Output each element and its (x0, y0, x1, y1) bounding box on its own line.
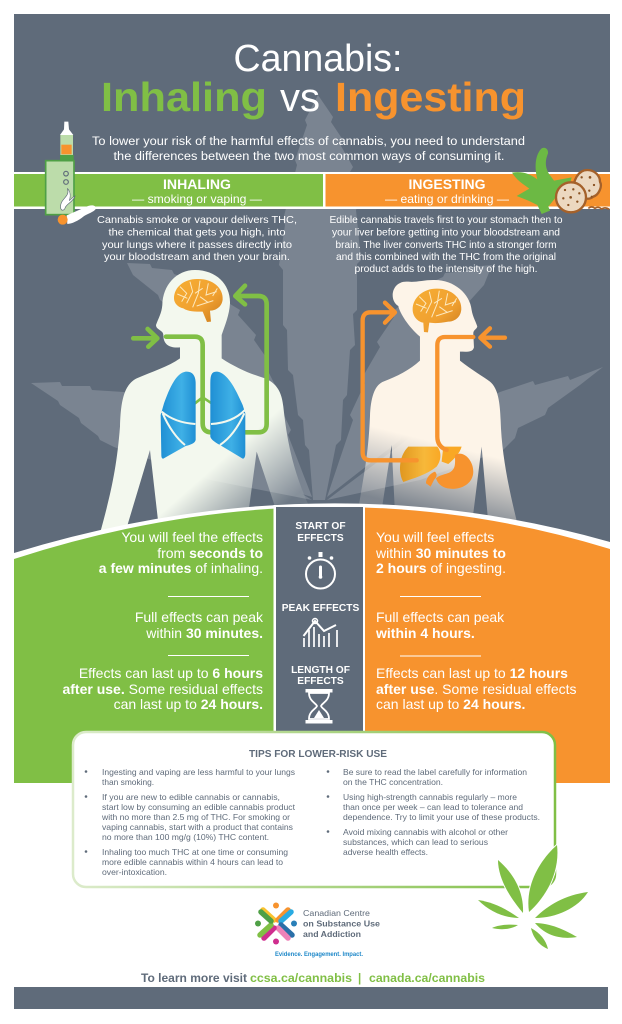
panel: ingesting effects: can last up to 24 hours. (376, 696, 525, 712)
footer link text: canada.ca/cannabis (369, 973, 485, 985)
panel: centre timeline column (274, 505, 365, 783)
tips: right column: Avoid mixing cannabis with alcohol or other (343, 827, 508, 837)
panel: centre timeline column: EFFECTS (297, 533, 344, 544)
header band: ingesting: INGESTING (408, 177, 486, 192)
panel: ingesting effects (365, 500, 610, 783)
panel: centre timeline column: PEAK EFFECTS (282, 603, 359, 614)
panel: inhaling effects: Full effects can peak (135, 609, 264, 625)
tips: left column: vaping cannabis, start with a product that contains (102, 822, 293, 832)
panel: ingesting effects: Full effects can peak (376, 609, 505, 625)
panel: ingesting effects: within 30 minutes to (375, 545, 506, 561)
tips: right column: adverse health effects. (343, 847, 428, 857)
text: inhaling description: Cannabis smoke or vapour delivers THC, (97, 214, 297, 226)
panel: ingesting effects: 2 hours of ingesting. (376, 560, 506, 576)
tips: left column: more edible cannabis within 4 hours can lead to (102, 857, 283, 867)
text: ingesting description: product adds to the intensity of the high. (354, 263, 538, 275)
footer link text (141, 973, 485, 985)
icon: leaf and cookies (512, 148, 609, 214)
text: inhaling description: your lungs where it passes directly into (102, 239, 292, 251)
title: Ingesting (335, 74, 526, 120)
title: vs (280, 76, 320, 120)
panel: centre timeline column: EFFECTS (297, 676, 344, 687)
text: ingesting description: your liver before getting into your bloodstream and (332, 226, 560, 238)
tips: left column: start low by consuming an edible cannabis product (102, 802, 296, 812)
panel: inhaling effects: You will feel the effects (121, 529, 263, 545)
tips: right column: Be sure to read the label carefully for information (343, 767, 527, 777)
header band: inhaling: — smoking or vaping — (132, 192, 262, 206)
icon: green cannabis leaf (478, 845, 588, 949)
brain (174, 279, 223, 322)
brain (413, 289, 461, 332)
tips: left column (85, 767, 296, 877)
panel: centre timeline column: LENGTH OF (291, 665, 350, 676)
liver and stomach (400, 447, 473, 489)
intro text (92, 134, 525, 163)
tips: left column: Ingesting and vaping are less harmful to your lungs (102, 767, 295, 777)
panel: ingesting effects: Effects can last up to 12 hours (376, 665, 568, 681)
title: Inhaling (101, 74, 267, 120)
tips: right column: substances, which can lead to serious (343, 837, 488, 847)
header band: inhaling: INHALING (163, 177, 231, 192)
tips: right column: than once per week – can lead to tolerance and (343, 802, 523, 812)
title: Cannabis: (234, 38, 402, 80)
text: inhaling description: the chemical that gets you high, into (108, 226, 286, 238)
ingesting digestive arrows (363, 303, 505, 460)
lungs (161, 372, 245, 459)
text: inhaling description: your bloodstream and then your brain. (104, 251, 290, 263)
white arc divider (14, 503, 610, 570)
intro text: the differences between the two most common ways of consuming it. (114, 149, 505, 163)
panel: centre timeline column: START OF (295, 521, 346, 532)
logo: Canadian Centre on Substance Use and Addiction: Canadian Centre (303, 908, 370, 918)
text: ingesting description (330, 214, 563, 275)
text: inhaling description (97, 214, 297, 263)
footer link text: | (358, 973, 361, 985)
inhaling airway arrows (133, 286, 267, 432)
icon: vape and joint (46, 122, 96, 225)
logo: Canadian Centre on Substance Use and Addiction: on Substance Use (303, 918, 380, 928)
panel: inhaling effects: Effects can last up to 6 hours (79, 665, 263, 681)
panel: inhaling effects: a few minutes of inhaling. (99, 560, 263, 576)
panel: tips for lower-risk use (73, 732, 555, 887)
icon: stopwatch (306, 552, 335, 588)
header band: inhaling (14, 172, 325, 209)
panel: tips for lower-risk use: TIPS FOR LOWER-RISK USE (249, 749, 387, 760)
footer link text: To learn more visit (141, 973, 247, 985)
logo: Canadian Centre on Substance Use and Addiction: and Addiction (303, 929, 361, 939)
panel: inhaling effects: after use. Some residual effects (62, 681, 263, 697)
title (101, 38, 526, 120)
tips: right column: dependence. Try to limit your use of these products. (343, 812, 540, 822)
text: ingesting description: Edible cannabis travels first to your stomach then to (330, 214, 563, 226)
panel: dark background (14, 14, 610, 783)
background cannabis leaf (31, 95, 603, 500)
figure: inhaling body (100, 270, 312, 533)
panel: inhaling effects: from seconds to (157, 545, 263, 561)
logo: Canadian Centre on Substance Use and Addiction: Evidence. Engagement. Impact. (275, 952, 363, 958)
tips: left column: If you are new to edible cannabis or cannabis, (102, 792, 280, 802)
panel: ingesting effects: You will feel effects (376, 529, 494, 545)
text: ingesting description: and this combined with the THC from the original (336, 251, 556, 263)
tips: left column: with no more than 2.5 mg of THC. For smoking or (101, 812, 290, 822)
icon: peak chart (304, 618, 337, 647)
panel: inhaling effects: can last up to 24 hours. (114, 696, 263, 712)
panel: inhaling effects (14, 500, 274, 783)
logo: Canadian Centre on Substance Use and Addiction (255, 902, 380, 958)
tips: right column (327, 767, 540, 857)
icon: hourglass (306, 689, 332, 724)
panel: ingesting effects: within 4 hours. (375, 625, 475, 641)
tips: left column: no more than 100 mg/g (10%) THC content. (102, 832, 269, 842)
tips: left column: Inhaling too much THC at one time or consuming (102, 847, 288, 857)
header band: ingesting: — eating or drinking — (385, 192, 509, 206)
intro text: To lower your risk of the harmful effects of cannabis, you need to understand (92, 134, 525, 148)
tips: right column: on the THC concentration. (343, 777, 443, 787)
tips: right column: Using high-strength cannabis regularly – more (343, 792, 517, 802)
panel: ingesting effects: after use. Some residual effects (376, 681, 577, 697)
figure: ingesting body (358, 280, 517, 523)
text: ingesting description: brain. The liver converts THC into a stronger form (336, 239, 557, 251)
header band: ingesting (323, 172, 610, 209)
tips: left column: than smoking. (102, 777, 154, 787)
footer link text: ccsa.ca/cannabis (250, 973, 352, 985)
panel: inhaling effects: within 30 minutes. (145, 625, 263, 641)
tips: left column: over-intoxication. (102, 867, 167, 877)
footer bar (14, 987, 608, 1009)
